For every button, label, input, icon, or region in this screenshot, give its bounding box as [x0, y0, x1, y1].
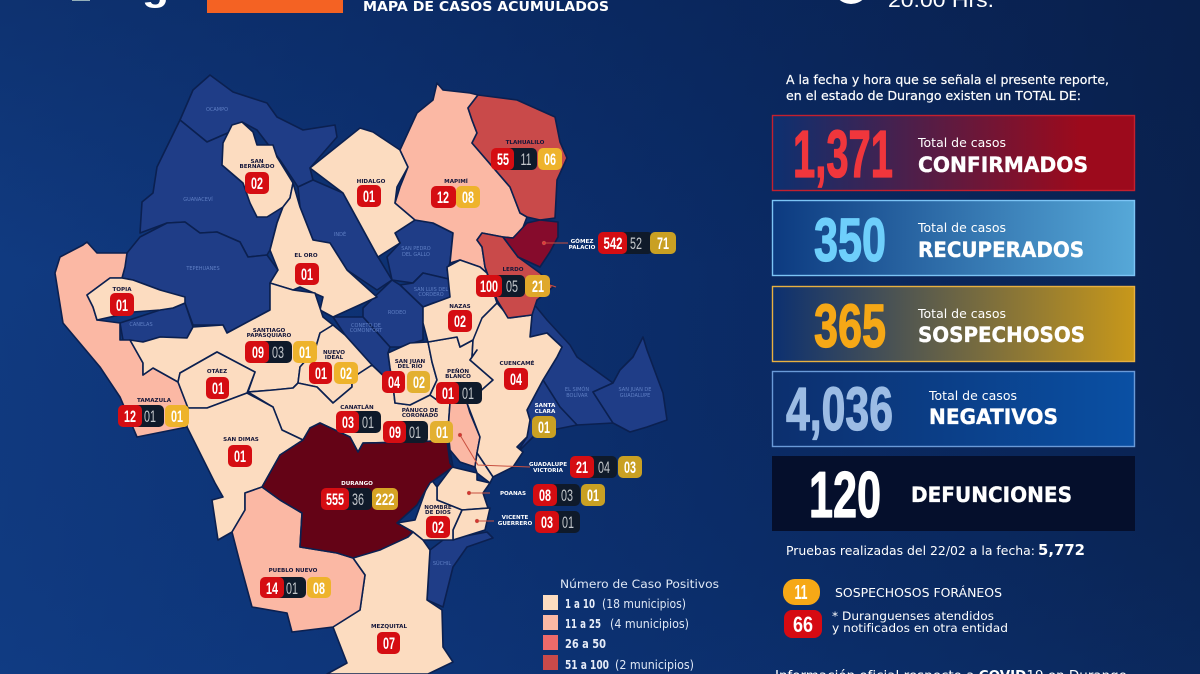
Mapimí: MAPIMÍ [444, 177, 468, 185]
El Oro: EL ORO [294, 253, 318, 259]
Cuencamé [500, 359, 535, 390]
municipality: Santa Clara [517, 380, 577, 453]
blue municipality labels: DEL GALLO [402, 252, 430, 258]
blue municipality labels: CANELAS [129, 322, 153, 328]
municipality: Lerdo [477, 233, 553, 318]
attended elsewhere: y notificados en otra entidad [832, 621, 1008, 635]
blue municipality labels: GUADALUPE [620, 393, 650, 399]
intro text: A la fecha y hora que se señala el presente reporte, [786, 72, 1109, 87]
Pueblo Nuevo [260, 568, 331, 598]
Poanas: 01 [587, 486, 599, 505]
Mezquital: 07 [383, 634, 395, 653]
map of Durango [55, 75, 667, 674]
Gómez Palacio: PALACIO [569, 245, 596, 251]
Tamazula: 01 [171, 407, 183, 426]
San Juan del Río: SAN JUAN [395, 359, 426, 365]
Nuevo Ideal: 01 [315, 364, 327, 383]
Guadalupe Victoria: 03 [624, 458, 636, 477]
Otáez: OTÁEZ [207, 368, 227, 375]
municipality: Rodeo [363, 280, 423, 347]
Tamazula: 01 [144, 407, 156, 426]
Pánuco de Coronado: 09 [389, 423, 401, 442]
panel: confirmados: CONFIRMADOS [918, 153, 1088, 177]
panel: defunciones: 120 [809, 458, 881, 531]
blue municipality labels: SAN LUIS DEL [414, 287, 448, 293]
Gómez Palacio: 52 [630, 234, 642, 253]
municipality: Guanaceví [140, 120, 283, 257]
legend item: 51 a 100: 51 a 100 [565, 657, 609, 672]
Guadalupe Victoria: 04 [598, 458, 610, 477]
Peñón Blanco: PEÑÓN [447, 368, 469, 375]
municipality: San Juan del Río [388, 342, 437, 405]
Gómez Palacio: GÓMEZ [571, 238, 593, 245]
San Dimas [223, 437, 259, 467]
panel: sospechosos [772, 286, 1134, 362]
Tlahualilo: 06 [544, 150, 556, 169]
municipality: Poanas [437, 467, 490, 510]
Gómez Palacio: 542 [604, 234, 622, 253]
Nombre de Dios [424, 505, 452, 538]
Pánuco de Coronado: CORONADO [402, 413, 438, 419]
municipality: Gómez Palacio [503, 220, 558, 267]
Canatlán: 03 [342, 413, 354, 432]
Hidalgo: 01 [363, 187, 375, 206]
Pueblo Nuevo: 01 [286, 579, 298, 598]
Cuencamé: CUENCAMÉ [500, 359, 535, 367]
Pueblo Nuevo: 08 [313, 579, 325, 598]
foreign suspects: SOSPECHOSOS FORÁNEOS [835, 585, 1002, 600]
Topia [110, 287, 134, 316]
Canatlán [336, 404, 381, 433]
blue municipality labels: OCAMPO [206, 107, 228, 113]
Tlahualilo [491, 140, 562, 170]
blue municipality labels: RODEO [388, 310, 406, 316]
header: subtitle: MAPA DE CASOS ACUMULADOS [363, 0, 609, 15]
legend item: 11 a 25 [543, 615, 689, 631]
Canatlán: CANATLÁN [340, 404, 374, 411]
municipality: Otáez [178, 352, 255, 408]
Vicente Guerrero: GUERRERO [498, 521, 532, 527]
foreign suspects [783, 579, 1002, 605]
Cuencamé: 04 [510, 370, 522, 389]
Pueblo Nuevo: 14 [266, 579, 278, 598]
Gómez Palacio: 71 [657, 234, 669, 253]
municipality: Tlahualilo [468, 95, 567, 220]
El Oro: 01 [301, 265, 313, 284]
panel: negativos [772, 372, 1134, 446]
Nazas: 02 [454, 312, 466, 331]
panel: recuperados [772, 200, 1134, 276]
municipality: Cuencamé [467, 303, 562, 477]
Pánuco de Coronado: PÁNUCO DE [402, 407, 438, 414]
panel: recuperados: Total de casos [917, 220, 1006, 235]
Santa Clara: SANTA [535, 403, 556, 409]
Poanas: 08 [539, 486, 551, 505]
Santiago Papasquiaro: 09 [252, 343, 264, 362]
Nombre de Dios: 02 [432, 518, 444, 537]
foreign suspects: 11 [794, 582, 808, 604]
Durango: 222 [376, 490, 394, 509]
blue municipality labels: SAN JUAN DE [619, 387, 651, 393]
Tamazula [118, 398, 189, 427]
municipality: Súchil [427, 532, 493, 607]
municipality: Pánuco de Coronado [448, 403, 480, 467]
San Juan del Río: 02 [413, 373, 425, 392]
El Oro [294, 253, 319, 285]
blue municipality labels: INDÉ [334, 230, 346, 238]
Hidalgo [357, 179, 386, 207]
attended elsewhere: * Duranguenses atendidos [832, 609, 994, 623]
legend item: 11 a 25: (4 municipios) [610, 617, 689, 631]
Santiago Papasquiaro: 03 [272, 343, 284, 362]
Tlahualilo: TLAHUALILO [506, 140, 545, 146]
Durango [321, 481, 398, 510]
municipality: Coneto de Comonfort [333, 317, 393, 385]
tests performed [786, 541, 1085, 559]
Poanas [500, 484, 605, 506]
Otáez [206, 368, 229, 399]
panel: negativos: 4,036 [786, 375, 893, 443]
Tamazula: TAMAZULA [137, 398, 172, 404]
Guadalupe Victoria: VICTORIA [533, 468, 564, 474]
Gómez Palacio [569, 232, 676, 254]
municipality: Simón Bolívar and east strip [530, 303, 613, 425]
legend item: 1 a 10 [543, 595, 686, 611]
Canatlán: 01 [362, 413, 374, 432]
Durango: 555 [326, 490, 344, 509]
municipality: Tamazula [55, 242, 188, 437]
Lerdo: LERDO [502, 267, 524, 273]
municipality: El Oro [270, 183, 377, 317]
municipality: Canelas [120, 303, 193, 342]
municipality: Nuevo Ideal [298, 325, 372, 403]
legend [543, 577, 719, 672]
blue municipality labels: CORDERO [418, 292, 444, 298]
Otáez: 01 [212, 379, 224, 398]
Tamazula: 12 [124, 407, 136, 426]
Mapimí: 12 [437, 188, 449, 207]
Poanas: POANAS [500, 491, 526, 497]
San Bernardo [239, 159, 275, 194]
blue municipality labels: CONETO DE [351, 323, 381, 329]
Santa Clara: 01 [538, 418, 550, 437]
panel: confirmados: Total de casos [917, 135, 1006, 150]
Nuevo Ideal [309, 350, 358, 384]
municipality: San Pedro del Gallo [387, 220, 453, 283]
municipality: Mezquital [327, 532, 453, 674]
legend: Número de Caso Positivos [560, 577, 719, 591]
municipality: Durango [262, 423, 453, 558]
Durango: DURANGO [341, 481, 373, 487]
Nombre de Dios: NOMBRE [424, 505, 452, 511]
Tlahualilo: 11 [520, 150, 532, 169]
panel: confirmados: 1,371 [793, 117, 893, 192]
municipality: Guadalupe Victoria [475, 453, 493, 483]
Vicente Guerrero: 01 [562, 513, 574, 532]
Lerdo: 100 [480, 277, 498, 296]
municipality: Topia [87, 278, 185, 320]
Santa Clara: CLARA [535, 409, 556, 415]
Vicente Guerrero [498, 511, 580, 533]
Nuevo Ideal: NUEVO [323, 350, 345, 356]
municipality: Indé [298, 180, 392, 290]
San Bernardo: 02 [251, 174, 263, 193]
San Dimas: 01 [234, 447, 246, 466]
Pueblo Nuevo: PUEBLO NUEVO [269, 568, 318, 574]
Santiago Papasquiaro: SANTIAGO [253, 328, 286, 334]
legend item: 11 a 25: 11 a 25 [565, 616, 601, 631]
Lerdo [476, 267, 550, 297]
municipality: Nazas [423, 260, 497, 347]
intro text: en el estado de Durango existen un TOTAL DE: [786, 88, 1081, 103]
Guadalupe Victoria [529, 456, 642, 478]
Mezquital [371, 624, 407, 654]
municipality: Tepehuanes [122, 222, 278, 333]
Peñón Blanco [436, 368, 482, 404]
panel: sospechosos: Total de casos [917, 306, 1006, 321]
Guadalupe Victoria: GUADALUPE [529, 462, 567, 468]
Vicente Guerrero: VICENTE [502, 515, 529, 521]
Poanas: 03 [561, 486, 573, 505]
blue municipality labels: BOLÍVAR [566, 392, 588, 399]
Nuevo Ideal: IDEAL [325, 355, 344, 361]
legend item: 1 a 10: 1 a 10 [565, 596, 595, 611]
blue municipality labels: COMONFORT [350, 328, 383, 334]
municipality: Mapimí [395, 83, 527, 273]
legend item: 1 a 10: (18 municipios) [602, 597, 686, 611]
panel: negativos: NEGATIVOS [929, 405, 1058, 429]
blue municipality labels: EL SIMÓN [565, 386, 589, 393]
Durango: 36 [352, 490, 364, 509]
panel: defunciones: DEFUNCIONES [911, 483, 1072, 507]
Hidalgo: HIDALGO [357, 179, 386, 185]
municipality: San Bernardo [222, 122, 293, 217]
San Juan del Río [382, 359, 430, 393]
municipality: Hidalgo [310, 128, 415, 257]
header: orange block [207, 0, 343, 13]
Santiago Papasquiaro: PAPASQUIARO [247, 333, 292, 339]
panel: recuperados: 350 [814, 206, 886, 274]
Peñón Blanco: 01 [462, 384, 474, 403]
municipality: Santiago Papasquiaro [130, 283, 333, 392]
San Juan del Río: 04 [388, 373, 400, 392]
panel: sospechosos: 365 [814, 292, 886, 360]
Topia: TOPIA [112, 287, 132, 293]
San Bernardo: BERNARDO [239, 164, 275, 170]
Topia: 01 [116, 296, 128, 315]
San Bernardo: SAN [250, 159, 264, 165]
attended elsewhere: 66 [793, 612, 813, 637]
Pánuco de Coronado [383, 407, 453, 443]
San Dimas: SAN DIMAS [223, 437, 259, 443]
blue municipality labels: GUANACEVÍ [183, 196, 213, 203]
Lerdo: 05 [506, 277, 518, 296]
blue municipality labels: SÚCHIL [433, 560, 451, 567]
Vicente Guerrero: 03 [541, 513, 553, 532]
municipality: San Juan de Guadalupe [593, 337, 667, 432]
header: logo fragment [72, 0, 169, 9]
blue municipality labels: TEPEHUANES [185, 266, 220, 272]
blue municipality labels [129, 107, 651, 567]
panel: sospechosos: SOSPECHOSOS [918, 323, 1085, 347]
panel: confirmados [772, 116, 1134, 192]
Tlahualilo: 55 [497, 150, 509, 169]
panel: negativos: Total de casos [928, 388, 1017, 403]
legend item: 26 a 50 [543, 635, 606, 651]
intro text [786, 72, 1109, 103]
panel: recuperados: RECUPERADOS [918, 238, 1084, 262]
Santa Clara [532, 403, 556, 438]
municipality: San Dimas [187, 393, 303, 540]
Nazas: NAZAS [449, 304, 471, 310]
Lerdo: 21 [532, 277, 544, 296]
attended elsewhere [784, 609, 1008, 638]
municipality: Ocampo [180, 75, 337, 187]
panel: defunciones [772, 456, 1135, 531]
leader lines [458, 241, 568, 523]
legend item: 26 a 50: 26 a 50 [565, 636, 606, 651]
Nazas [448, 304, 472, 332]
legend item: 51 a 100 [543, 655, 694, 672]
Nombre de Dios: DE DIOS [425, 510, 451, 516]
Peñón Blanco: 01 [442, 384, 454, 403]
blue municipality labels: SAN PEDRO [401, 246, 431, 252]
Nuevo Ideal: 02 [340, 364, 352, 383]
municipality: Nombre de Dios [397, 478, 462, 540]
municipality: San Luis del Cordero [400, 273, 455, 307]
Pánuco de Coronado: 01 [409, 423, 421, 442]
Mezquital: MEZQUITAL [371, 624, 407, 630]
Peñón Blanco: BLANCO [445, 374, 471, 380]
tests performed: 5,772 [1038, 541, 1085, 559]
Santiago Papasquiaro: 01 [299, 343, 311, 362]
municipality: Pueblo Nuevo [232, 487, 365, 632]
San Juan del Río: DEL RÍO [397, 362, 423, 370]
Mapimí: 08 [462, 188, 474, 207]
municipality: Peñón Blanco [428, 337, 493, 403]
legend item: 51 a 100: (2 municipios) [615, 658, 694, 672]
Santiago Papasquiaro [245, 328, 317, 363]
Pánuco de Coronado: 01 [436, 423, 448, 442]
municipality: Canatlán [248, 365, 453, 467]
header: clock icon fragment [833, 0, 869, 4]
tests performed: Pruebas realizadas del 22/02 a la fecha: [786, 543, 1035, 558]
Mapimí [431, 177, 480, 208]
municipality: Vicente Guerrero [453, 508, 490, 540]
Guadalupe Victoria: 21 [576, 458, 588, 477]
